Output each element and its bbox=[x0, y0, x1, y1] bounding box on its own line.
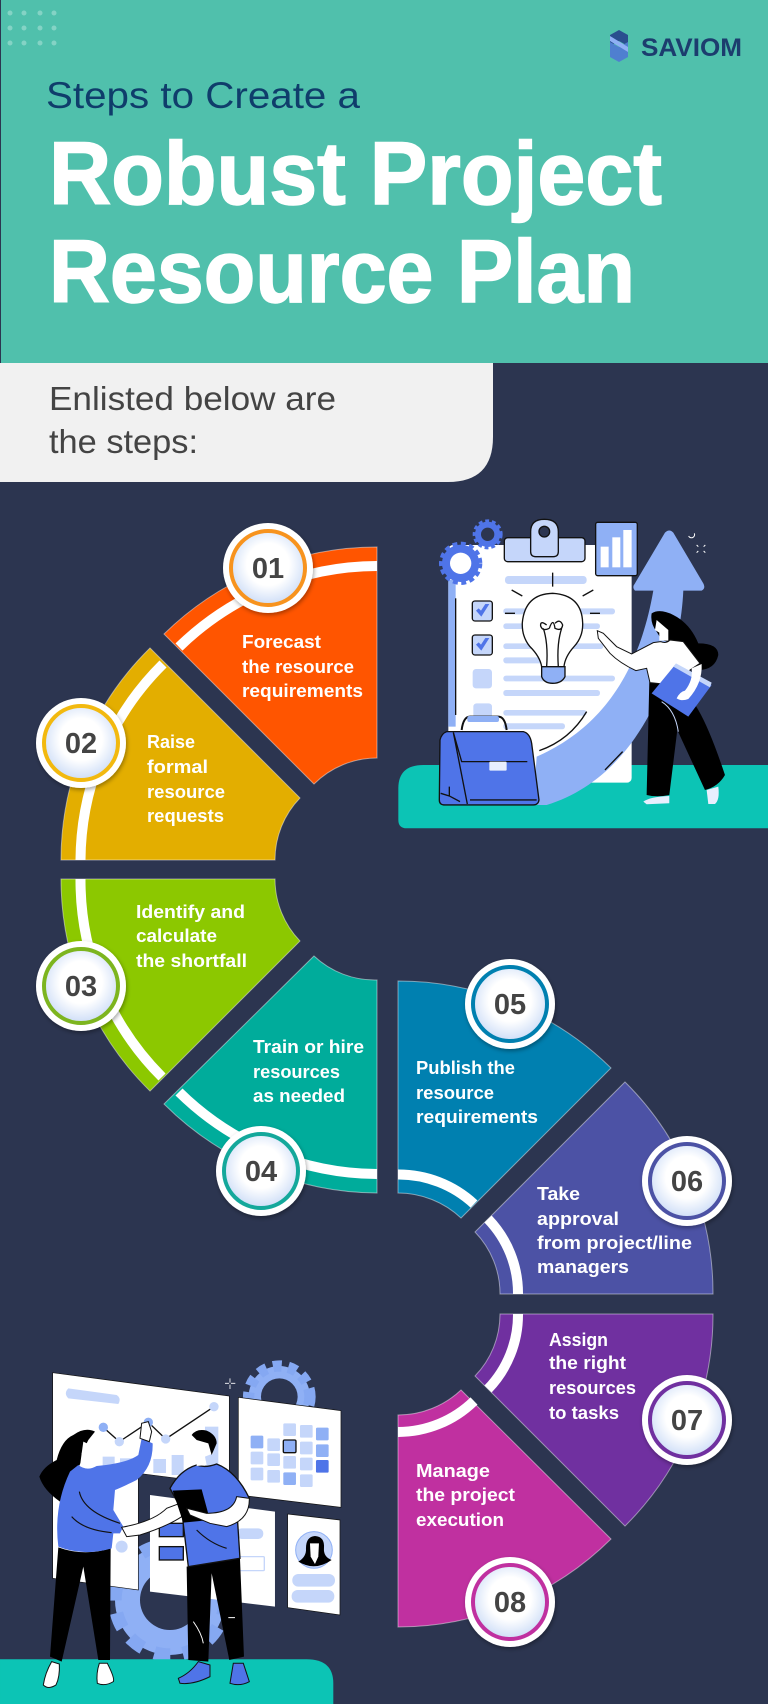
intro panel bbox=[0, 363, 493, 482]
step 03 bbox=[36, 879, 300, 1091]
step 07 bbox=[475, 1314, 732, 1526]
step 08 bbox=[398, 1390, 611, 1647]
title: main: Resource Plan bbox=[49, 221, 635, 321]
step 02: requests bbox=[147, 806, 224, 826]
step 01 bbox=[164, 523, 377, 784]
illustration: team reviewing dashboards bbox=[0, 1366, 341, 1704]
intro panel: Enlisted below are bbox=[49, 380, 336, 417]
step 05 bbox=[398, 959, 611, 1218]
step 06: approval bbox=[537, 1209, 619, 1229]
step 03: 03 bbox=[65, 971, 97, 1003]
step 07: 07 bbox=[671, 1405, 703, 1437]
step 08: execution bbox=[416, 1510, 504, 1530]
step 05: 05 bbox=[494, 989, 526, 1021]
step 04: resources bbox=[253, 1062, 340, 1082]
step 06 bbox=[475, 1082, 732, 1294]
step 01: Forecast bbox=[242, 632, 321, 652]
step 04 bbox=[164, 956, 377, 1216]
step 02: 02 bbox=[65, 728, 97, 760]
illustration: planning clipboard with woman bbox=[398, 519, 768, 828]
title: intro line: Steps to Create a bbox=[46, 75, 360, 116]
step 06: Take bbox=[537, 1184, 580, 1204]
step 02: resource bbox=[147, 782, 225, 802]
header band bbox=[0, 0, 768, 363]
step 05: requirements bbox=[416, 1107, 538, 1127]
step 04: as needed bbox=[253, 1086, 345, 1106]
logo: Saviom bbox=[610, 30, 742, 62]
step 06: managers bbox=[537, 1257, 629, 1277]
logo: Saviom: SAVIOM bbox=[641, 34, 742, 62]
step 02: formal bbox=[147, 757, 208, 777]
step 07: resources bbox=[549, 1378, 636, 1398]
step 08: Manage bbox=[416, 1461, 490, 1481]
step 07: the right bbox=[549, 1353, 626, 1373]
step 03: Identify and bbox=[136, 902, 245, 922]
step 01: requirements bbox=[242, 681, 363, 701]
step 01: 01 bbox=[252, 553, 284, 585]
step 01: the resource bbox=[242, 657, 354, 677]
step 03: the shortfall bbox=[136, 951, 247, 971]
step 08: 08 bbox=[494, 1587, 526, 1619]
step 06: 06 bbox=[671, 1166, 703, 1198]
decorative dots bbox=[8, 10, 56, 46]
step 04: 04 bbox=[245, 1156, 277, 1188]
step 08: the project bbox=[416, 1485, 515, 1505]
step 03: calculate bbox=[136, 926, 217, 946]
step 05: resource bbox=[416, 1083, 494, 1103]
step 05: Publish the bbox=[416, 1058, 515, 1078]
step 04: Train or hire bbox=[253, 1037, 364, 1057]
title: main: Robust Project bbox=[49, 123, 662, 223]
step 02 bbox=[36, 648, 300, 860]
step 07: to tasks bbox=[549, 1403, 619, 1423]
title: main bbox=[49, 123, 662, 321]
step 02: Raise bbox=[147, 732, 195, 752]
step 06: from project/line bbox=[537, 1233, 692, 1253]
intro panel: the steps: bbox=[49, 423, 198, 460]
step 07: Assign bbox=[549, 1330, 608, 1350]
